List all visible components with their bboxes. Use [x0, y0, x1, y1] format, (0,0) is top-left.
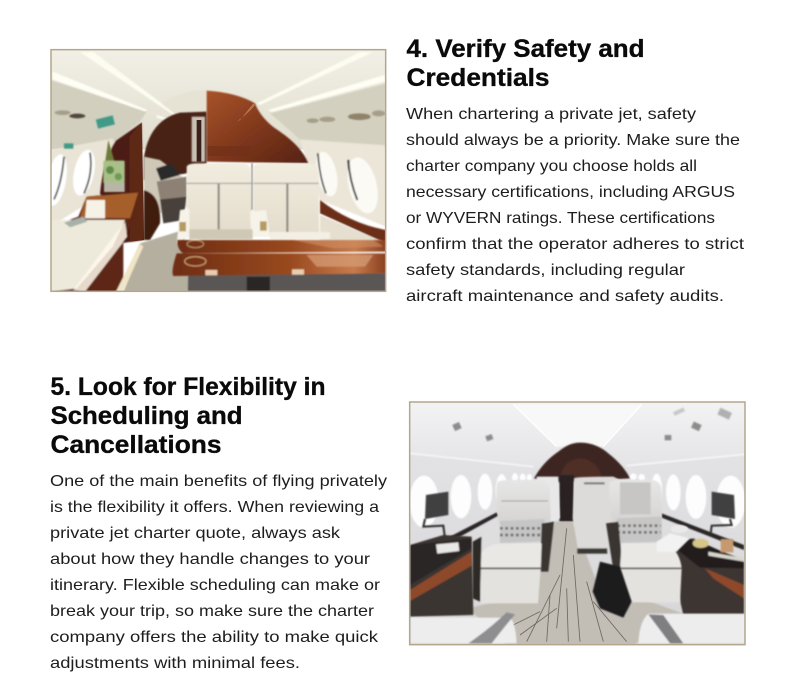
briefcase: [593, 562, 632, 618]
body text: step 4: safety standards, including regular: [406, 262, 686, 279]
left partition: [100, 123, 144, 243]
right wood trim: [319, 200, 385, 242]
heading: step 5: [50, 373, 326, 459]
heading: step 5: 5. Look for Flexibility in: [50, 373, 326, 401]
body text: step 5: One of the main benefits of flying privately: [50, 473, 387, 490]
carpet: [468, 522, 687, 645]
left windows: [52, 114, 116, 206]
right windows: [316, 152, 378, 214]
heading: step 4: 4. Verify Safety and: [406, 35, 644, 63]
body text: step 5: is the flexibility it offers. When reviewing a: [50, 499, 379, 516]
windows: [409, 473, 745, 528]
photo border: [410, 402, 745, 645]
seats: [177, 163, 330, 243]
body text: step 4: should always be a priority. Make sure the: [406, 132, 740, 149]
ceiling: [51, 49, 386, 149]
heading: step 5: Cancellations: [50, 431, 222, 459]
right seat: [606, 480, 690, 602]
body text: step 4: or WYVERN ratings. These certifications: [406, 210, 715, 227]
ceiling and walls: [410, 454, 744, 644]
rear arch: [164, 104, 175, 114]
wood bulkhead: [207, 91, 308, 163]
body text: step 5: break your trip, so make sure the charter: [50, 603, 375, 620]
body text: step 5: about how they handle changes to your: [50, 551, 371, 568]
body text: step 5: company offers the ability to make quick: [50, 629, 379, 646]
left credenza: [51, 192, 143, 292]
light strips: [53, 52, 385, 122]
plant: [103, 140, 125, 192]
heading: step 4: [406, 35, 644, 92]
ceiling fittings: [452, 407, 732, 441]
body text: step 5: itinerary. Flexible scheduling can make or: [50, 577, 381, 594]
photo: cabin with wood panelling and cream seats: [50, 48, 386, 292]
photo border: [51, 50, 386, 291]
left console: [410, 535, 473, 617]
body text: step 4: charter company you choose holds all: [406, 158, 697, 175]
body text: step 4: aircraft maintenance and safety audits.: [406, 288, 724, 305]
body text: step 5: [50, 473, 387, 672]
body text: step 5: adjustments with minimal fees.: [50, 655, 300, 672]
right console: [667, 538, 744, 615]
rear bulkhead: [534, 443, 630, 482]
rear seats: [537, 477, 620, 554]
body text: step 4: necessary certifications, including ARGUS: [406, 184, 735, 201]
foreground seats: [411, 612, 745, 643]
photo: white cabin with grey seats and striped carpet: [408, 401, 746, 646]
rear sofa: [144, 157, 187, 240]
heading: step 4: Credentials: [406, 64, 550, 92]
overhead vents: [55, 110, 385, 123]
body text: step 4: confirm that the operator adheres to strict: [406, 236, 745, 253]
table: [173, 240, 386, 292]
body text: step 5: private jet charter quote, always ask: [50, 525, 341, 542]
wall dado: [450, 512, 498, 540]
body text: step 4: When chartering a private jet, safety: [406, 106, 696, 123]
body text: step 4: [406, 106, 745, 305]
wall panels: [51, 138, 113, 227]
left seat: [473, 480, 554, 603]
carpet: [123, 230, 190, 292]
screens: [423, 492, 735, 538]
heading: step 5: Scheduling and: [50, 402, 242, 430]
